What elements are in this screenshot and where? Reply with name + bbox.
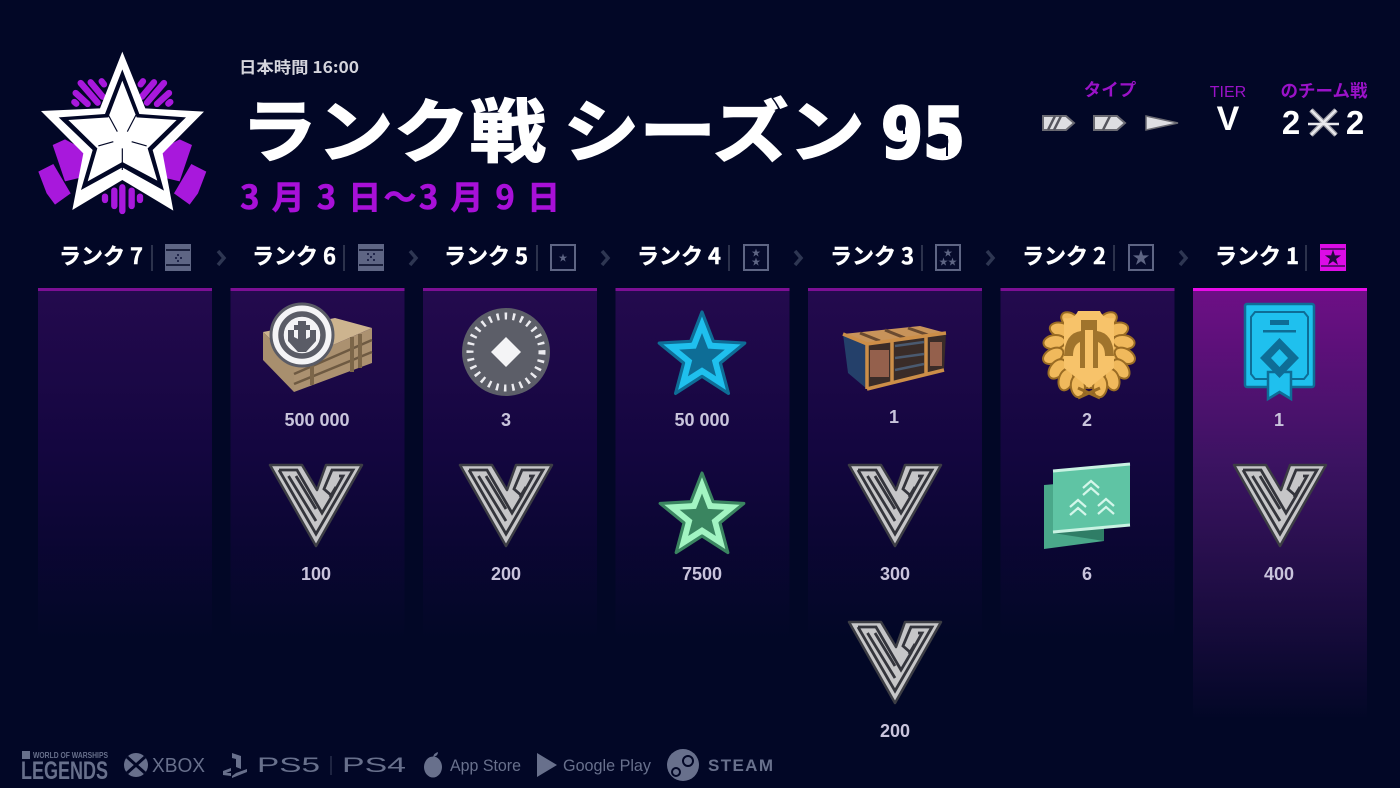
rank 4 header: ランク 4: [637, 239, 721, 271]
panel: rank 2: [1000, 288, 1174, 640]
chevron: [410, 251, 416, 265]
game logo: LEGENDS: [21, 757, 108, 785]
value: 100: [301, 564, 331, 584]
rank 2 header: ランク 2: [1022, 239, 1106, 271]
tier header: [1210, 84, 1246, 138]
rank 1 header: [1215, 239, 1345, 271]
playstation: PS5: [257, 754, 320, 777]
value: 500 000: [284, 410, 350, 430]
rank 1 header: ランク 1: [1215, 239, 1299, 271]
value: 400: [1264, 564, 1294, 584]
icon: V tokens: [849, 622, 941, 703]
google play: [537, 753, 651, 777]
panel: rank 4: [616, 288, 790, 640]
rank 7 header: ランク 7: [59, 239, 143, 271]
chevron: [602, 251, 608, 265]
value: 1: [1274, 410, 1284, 430]
steam: STEAM: [708, 756, 773, 775]
chevron: [987, 251, 993, 265]
tier header: V: [1217, 100, 1240, 138]
icon: green star: [660, 473, 744, 553]
rank headers: [59, 239, 1345, 271]
rank 6 header: ランク 6: [252, 239, 336, 271]
rank 3 header: [830, 239, 960, 271]
date range: 3 月 3 日〜3 月 9 日: [240, 171, 560, 219]
panel: rank 7: [38, 288, 212, 640]
app store: [424, 752, 521, 778]
icon: V tokens: [270, 465, 362, 546]
value: 300: [880, 564, 910, 584]
tier header: TIER: [1210, 84, 1246, 101]
rank 5 header: [444, 239, 575, 271]
icon: V tokens: [460, 465, 552, 546]
logo: rank star emblem: [38, 52, 206, 211]
icon: gold laurel emblem: [1039, 304, 1139, 402]
icon: V tokens: [849, 465, 941, 546]
team battle header: 2: [1282, 104, 1300, 141]
chevron: [1180, 251, 1186, 265]
footer: platform logos: [21, 749, 773, 785]
value: 7500: [682, 564, 722, 584]
icon: green banners: [1044, 463, 1130, 549]
value: 200: [491, 564, 521, 584]
team battle header: [1281, 78, 1368, 141]
value: 2: [1082, 410, 1092, 430]
rank 3 header: ランク 3: [830, 239, 914, 271]
google play: Google Play: [563, 756, 651, 775]
panel: rank 1: [1193, 288, 1367, 720]
value: 200: [880, 721, 910, 741]
rank 2 header: [1022, 239, 1153, 271]
app store: App Store: [450, 756, 521, 775]
steam: [667, 749, 773, 781]
ship type header: タイプ: [1084, 77, 1137, 102]
team battle header: のチーム戦: [1281, 78, 1368, 103]
icon: blue crate: [843, 326, 946, 389]
icon: V tokens: [1234, 465, 1326, 546]
value: 6: [1082, 564, 1092, 584]
rank 5 header: ランク 5: [444, 239, 528, 271]
value: 3: [501, 410, 511, 430]
title: ランク戦: [241, 76, 546, 176]
icon: blue star: [659, 312, 745, 393]
value: 1: [889, 407, 899, 427]
title: [241, 76, 965, 176]
game logo: [21, 751, 109, 785]
panel: rank 6: [230, 288, 404, 640]
icon: blue certificate: [1245, 304, 1314, 399]
icon: signal coin: [462, 308, 550, 396]
team battle header: 2: [1346, 104, 1364, 141]
game logo: WORLD OF WARSHIPS: [33, 751, 109, 760]
value: 50 000: [674, 410, 730, 430]
xbox: XBOX: [152, 755, 205, 777]
xbox: [124, 753, 205, 777]
chevron: [218, 251, 224, 265]
chevron: [795, 251, 801, 265]
ship type header: [1043, 77, 1178, 130]
panel: rank 5: [423, 288, 597, 640]
title: シーズン: [563, 76, 865, 176]
playstation: [223, 753, 407, 778]
rank 7 header: [59, 239, 190, 271]
time label: 日本時間 16:00: [239, 54, 359, 78]
title: 95: [881, 93, 965, 175]
playstation: PS4: [342, 754, 407, 777]
rank 6 header: [252, 239, 383, 271]
rank 4 header: [637, 239, 768, 271]
panel: rank 3: [808, 288, 982, 741]
icon: credits crate: [263, 304, 372, 392]
